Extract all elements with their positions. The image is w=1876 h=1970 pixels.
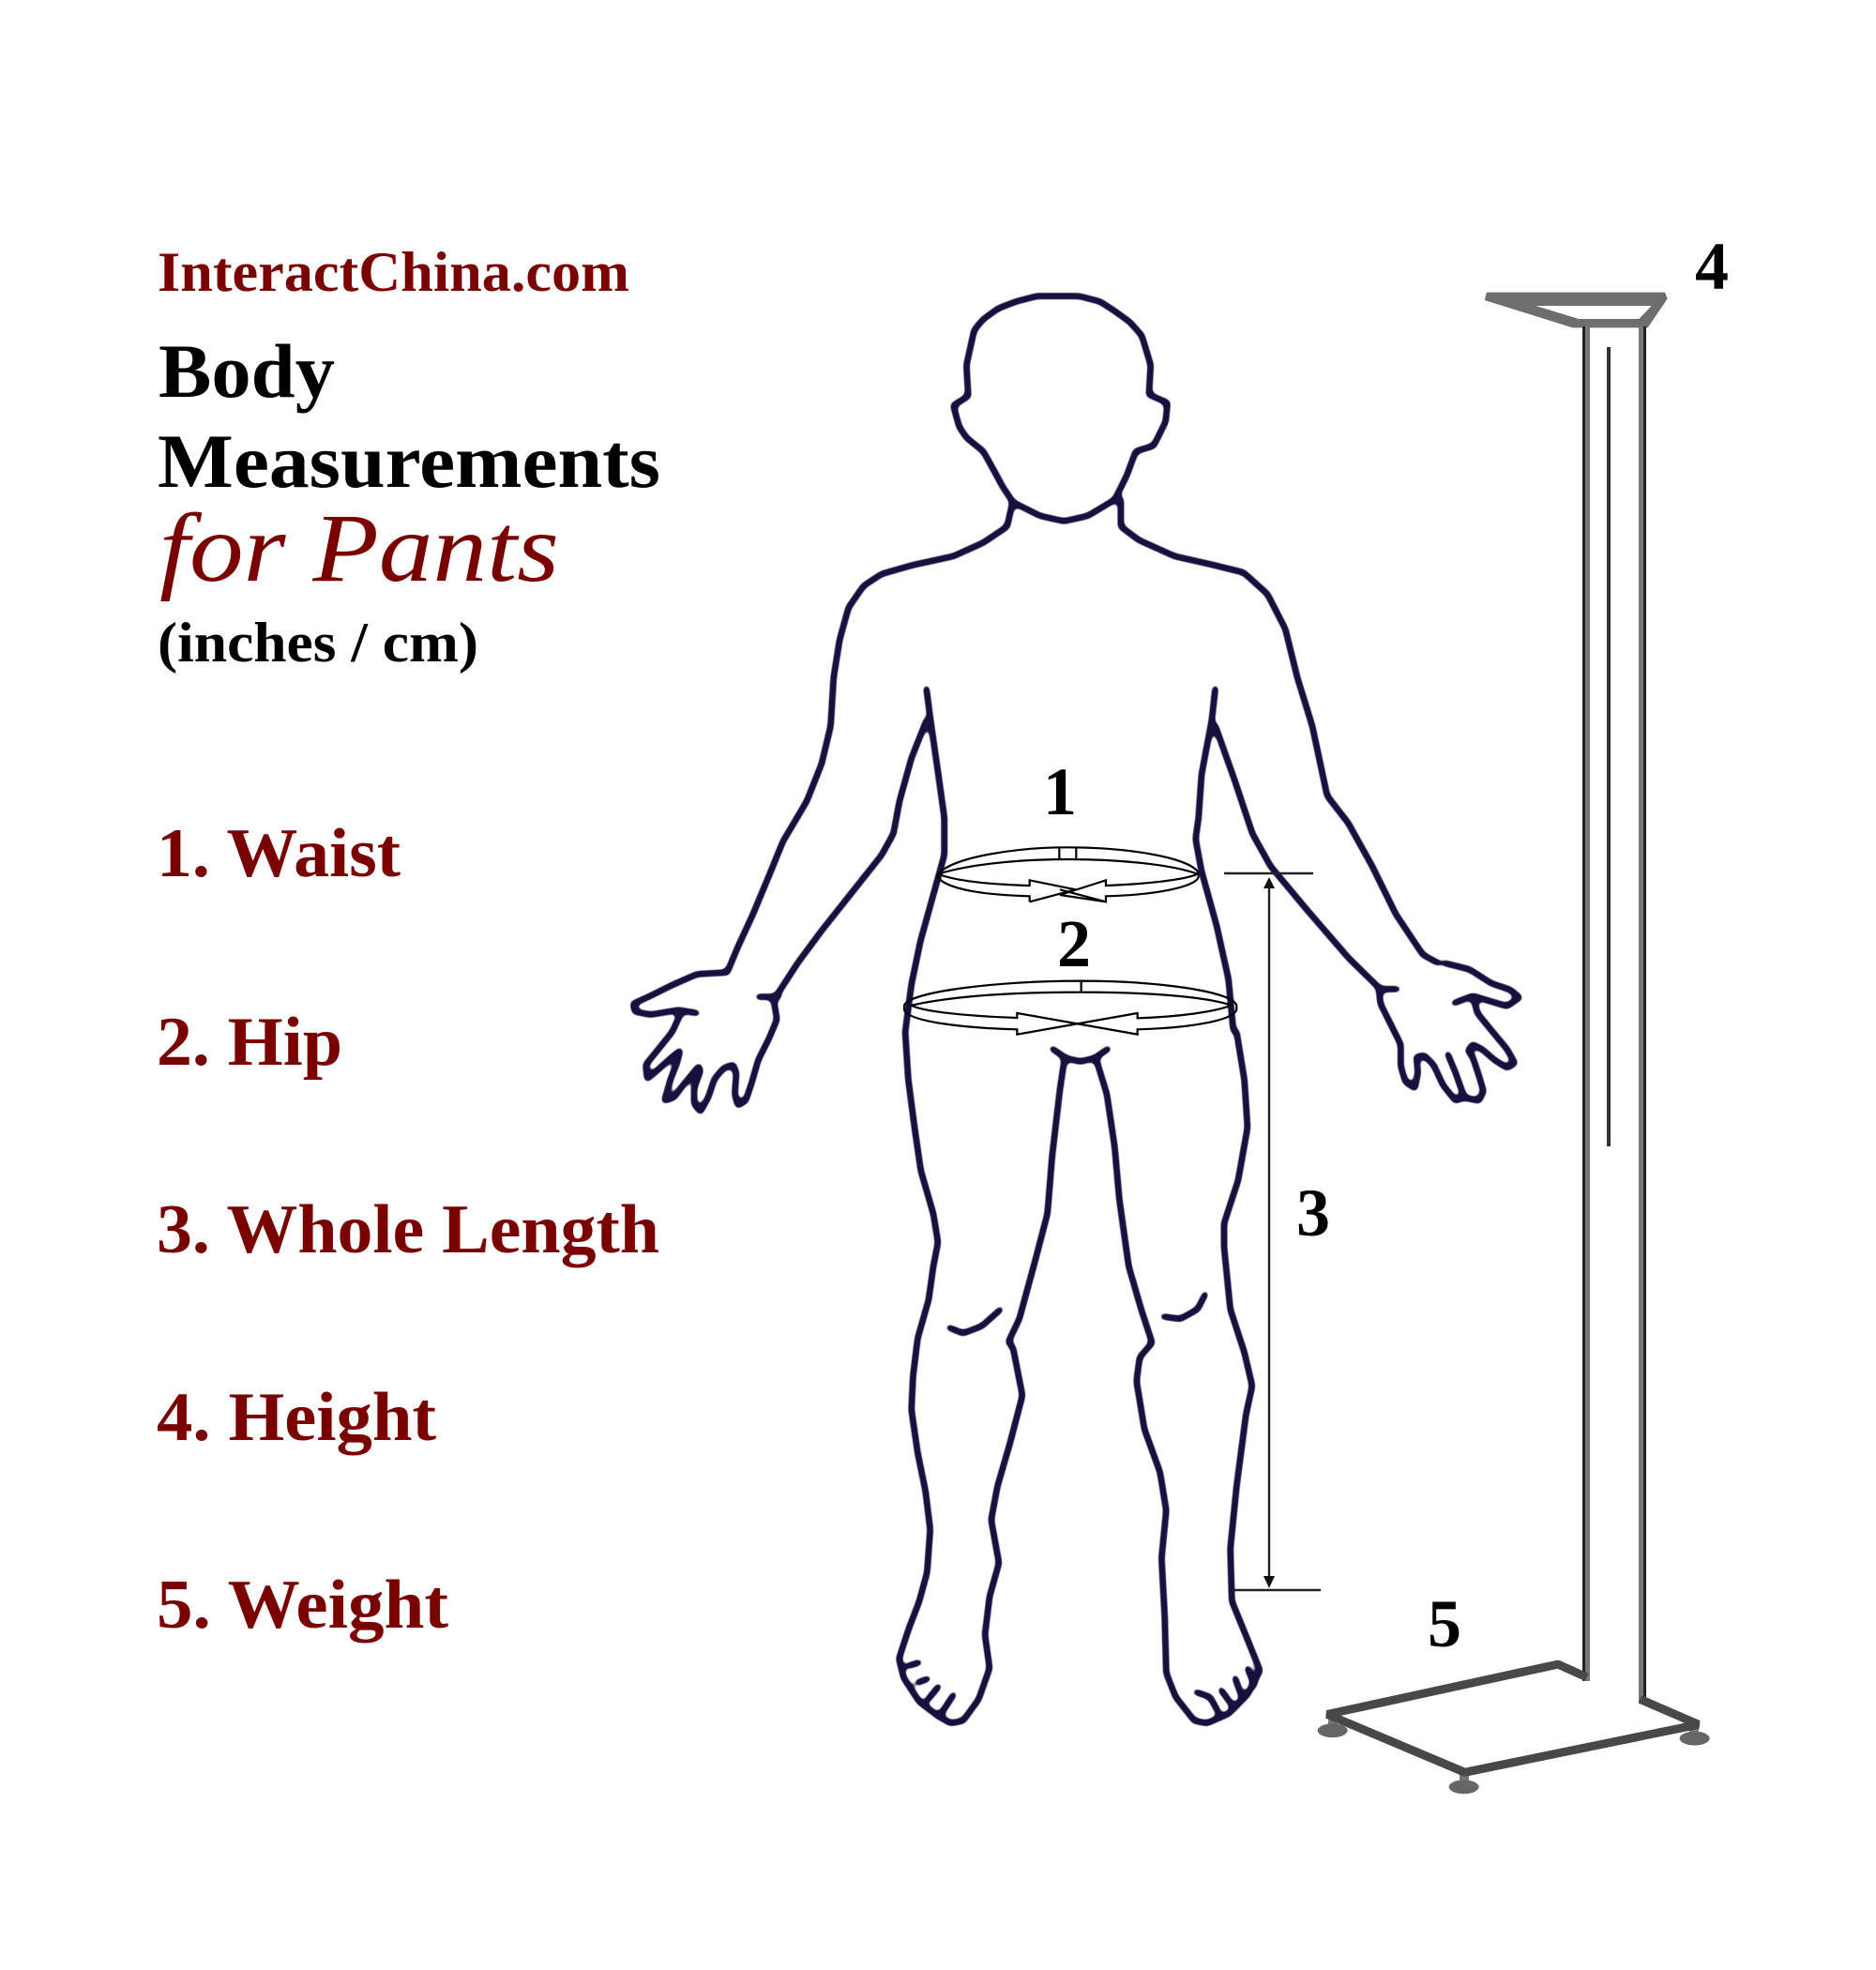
hip measuring loop — [904, 981, 1236, 1035]
stand centre slot — [1607, 347, 1611, 1146]
right arm outer line — [1121, 500, 1438, 962]
number 2: 2 — [1057, 906, 1091, 981]
icon: height measuring stand — [1318, 293, 1710, 1794]
number 5: 5 — [1428, 1586, 1461, 1661]
list item: waist: 1. Waist — [157, 815, 401, 892]
base frame — [1327, 1664, 1699, 1772]
list item: hip: 2. Hip — [157, 1004, 342, 1081]
panel: title block — [158, 241, 660, 674]
diagram numbers — [1043, 229, 1729, 1661]
number 3: 3 — [1296, 1175, 1330, 1250]
body figure outline — [633, 296, 1520, 1723]
left hand — [633, 973, 779, 1112]
right arm inner line — [1216, 726, 1381, 990]
left toes — [908, 1662, 954, 1714]
right torso line — [1196, 689, 1233, 1030]
legs and feet — [899, 1032, 1260, 1723]
waist measuring loop — [937, 847, 1199, 902]
number 4: 4 — [1695, 229, 1729, 304]
head — [953, 296, 1168, 522]
right toes — [1196, 1668, 1254, 1711]
knee marks — [949, 1294, 1205, 1333]
heading: Measurements: Measurements — [158, 418, 660, 504]
list item: height: 4. Height — [157, 1379, 436, 1456]
stand right column — [1639, 326, 1646, 1702]
number 1: 1 — [1043, 754, 1077, 829]
site name: InteractChina.com — [158, 241, 629, 303]
list item: weight: 5. Weight — [157, 1567, 448, 1644]
left arm outer line — [727, 505, 1012, 973]
base feet — [1318, 1716, 1710, 1794]
stand top bracket — [1485, 293, 1668, 327]
right leg — [1096, 1032, 1260, 1723]
list item: whole length: 3. Whole Length — [157, 1191, 659, 1268]
right hand — [1379, 963, 1520, 1100]
measurement arrow: whole length — [1224, 873, 1321, 1590]
upper body outline — [727, 296, 1438, 1030]
heading: Body: Body — [159, 328, 335, 414]
left torso line — [905, 689, 945, 1030]
stand left column — [1582, 326, 1590, 1681]
units note: (inches / cm) — [158, 612, 478, 674]
subheading: for Pants: for Pants — [159, 494, 559, 602]
left arm inner line — [777, 720, 927, 995]
crotch line — [1052, 1049, 1109, 1062]
left leg — [899, 1032, 1065, 1723]
panel: measurement list — [157, 815, 659, 1644]
scale base — [1318, 1664, 1710, 1794]
